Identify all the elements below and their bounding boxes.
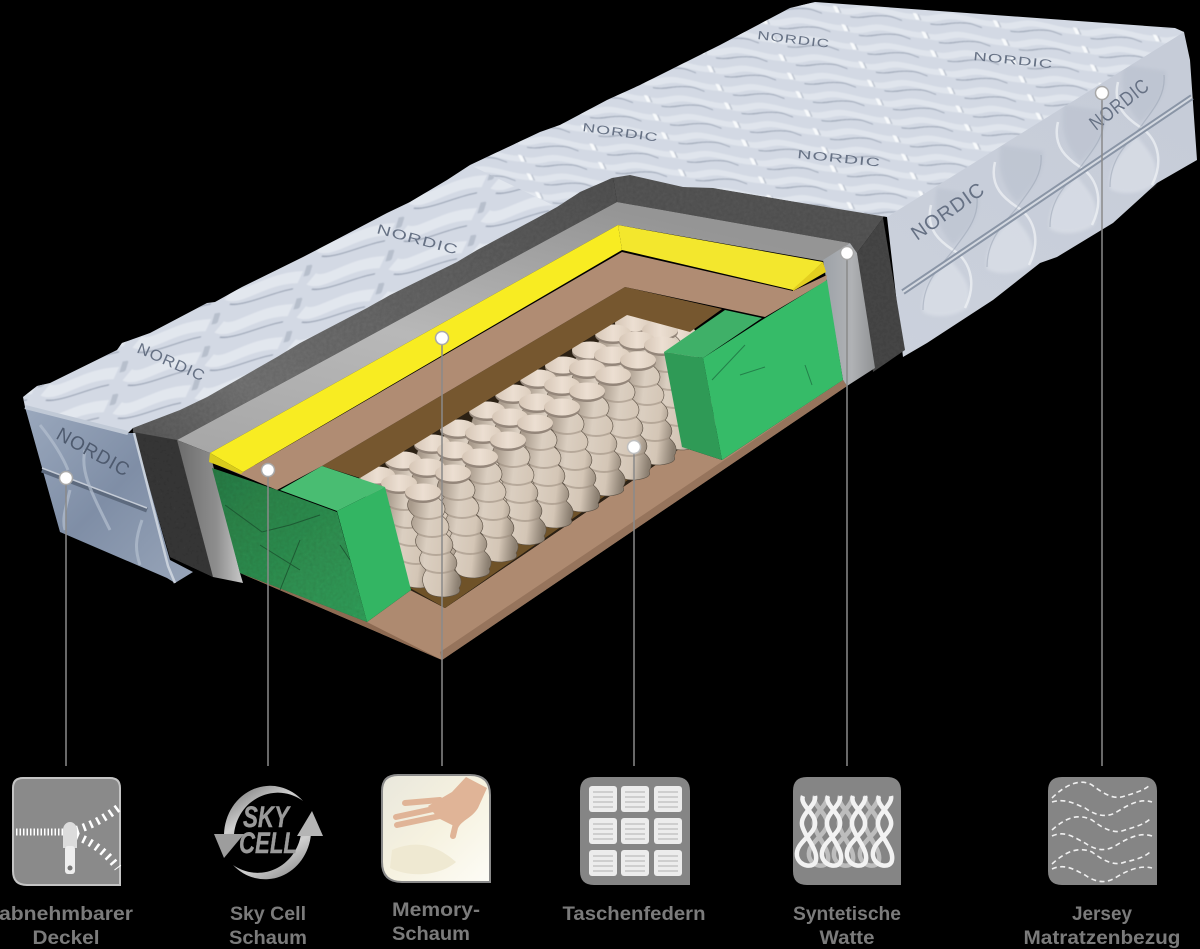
icon: jersey stitching bbox=[1048, 777, 1157, 885]
spring floor felt bbox=[410, 430, 682, 608]
icon: Sky Cell: SKY bbox=[243, 801, 291, 834]
label: Sky Cell Schaum: Sky Cell bbox=[230, 904, 306, 925]
brand prints on top: NORDIC bbox=[582, 121, 659, 145]
cover right side face bbox=[880, 29, 1197, 357]
leader: Memory-Schaum bbox=[436, 332, 448, 766]
label: Memory-Schaum: Memory- bbox=[392, 900, 480, 921]
label: Syntetische Watte: Syntetische bbox=[793, 904, 901, 925]
label: Memory-Schaum: Schaum bbox=[392, 924, 470, 945]
layer: green sky cell foam right bbox=[664, 280, 843, 460]
brand prints on top: NORDIC bbox=[973, 50, 1054, 71]
icon: memory foam hand bbox=[382, 775, 490, 882]
icon: pocket springs grid bbox=[580, 777, 690, 885]
cover left end face bbox=[25, 407, 193, 583]
layer: tan foam top bbox=[210, 252, 827, 490]
brand prints on top: NORDIC bbox=[375, 221, 460, 258]
leader: Syntetische Watte bbox=[840, 246, 854, 766]
brand prints on top: NORDIC bbox=[757, 29, 831, 51]
icon: synthetic wadding braid bbox=[793, 777, 901, 885]
brand prints on top bbox=[134, 29, 1054, 385]
pocket springs bbox=[359, 314, 716, 597]
layer: dark outer foam bbox=[133, 170, 905, 577]
cover left end face: NORDIC bbox=[53, 424, 134, 482]
spring pit bbox=[360, 315, 690, 608]
icon: Sky Cell bbox=[214, 786, 323, 879]
label: abnehmbarer Deckel bbox=[0, 904, 134, 949]
label: Jersey Matratzenbezug bbox=[1024, 904, 1180, 949]
label: Syntetische Watte bbox=[793, 904, 901, 949]
leader: Jersey Matratzenbezug bbox=[1096, 86, 1108, 766]
leader: Sky Cell Schaum bbox=[262, 464, 274, 766]
mattress illustration bbox=[0, 0, 1200, 660]
label: Sky Cell Schaum bbox=[229, 904, 307, 949]
label: Memory-Schaum bbox=[392, 900, 480, 945]
brand prints on top: NORDIC bbox=[134, 340, 208, 385]
icon: Sky Cell: CELL bbox=[239, 827, 297, 860]
leader: Taschenfedern bbox=[628, 440, 640, 766]
label: abnehmbarer Deckel: Deckel bbox=[32, 928, 100, 949]
layer: synthetic wadding gray bbox=[177, 202, 875, 583]
cover top surface with quilting bbox=[0, 0, 1200, 450]
cover side print: NORDIC bbox=[1085, 74, 1153, 134]
label: Sky Cell Schaum: Schaum bbox=[229, 928, 307, 949]
cover side print bbox=[907, 74, 1153, 245]
brand prints on top: NORDIC bbox=[797, 148, 882, 170]
label: abnehmbarer Deckel: abnehmbarer bbox=[0, 904, 134, 925]
cover side print: NORDIC bbox=[907, 178, 989, 245]
label: Syntetische Watte: Watte bbox=[820, 928, 874, 949]
label: Jersey Matratzenbezug: Matratzenbezug bbox=[1024, 928, 1180, 949]
layer: yellow memory foam bbox=[209, 225, 826, 474]
layer: brown felt wall bbox=[322, 287, 722, 478]
layer: bottom tan foam bbox=[240, 380, 847, 660]
layer: green sky cell foam left bbox=[212, 466, 411, 622]
leader: abnehmbarer Deckel bbox=[60, 472, 72, 766]
label: Taschenfedern: Taschenfedern bbox=[562, 904, 706, 925]
icon: zipper bbox=[13, 778, 120, 885]
label: Jersey Matratzenbezug: Jersey bbox=[1072, 904, 1132, 925]
